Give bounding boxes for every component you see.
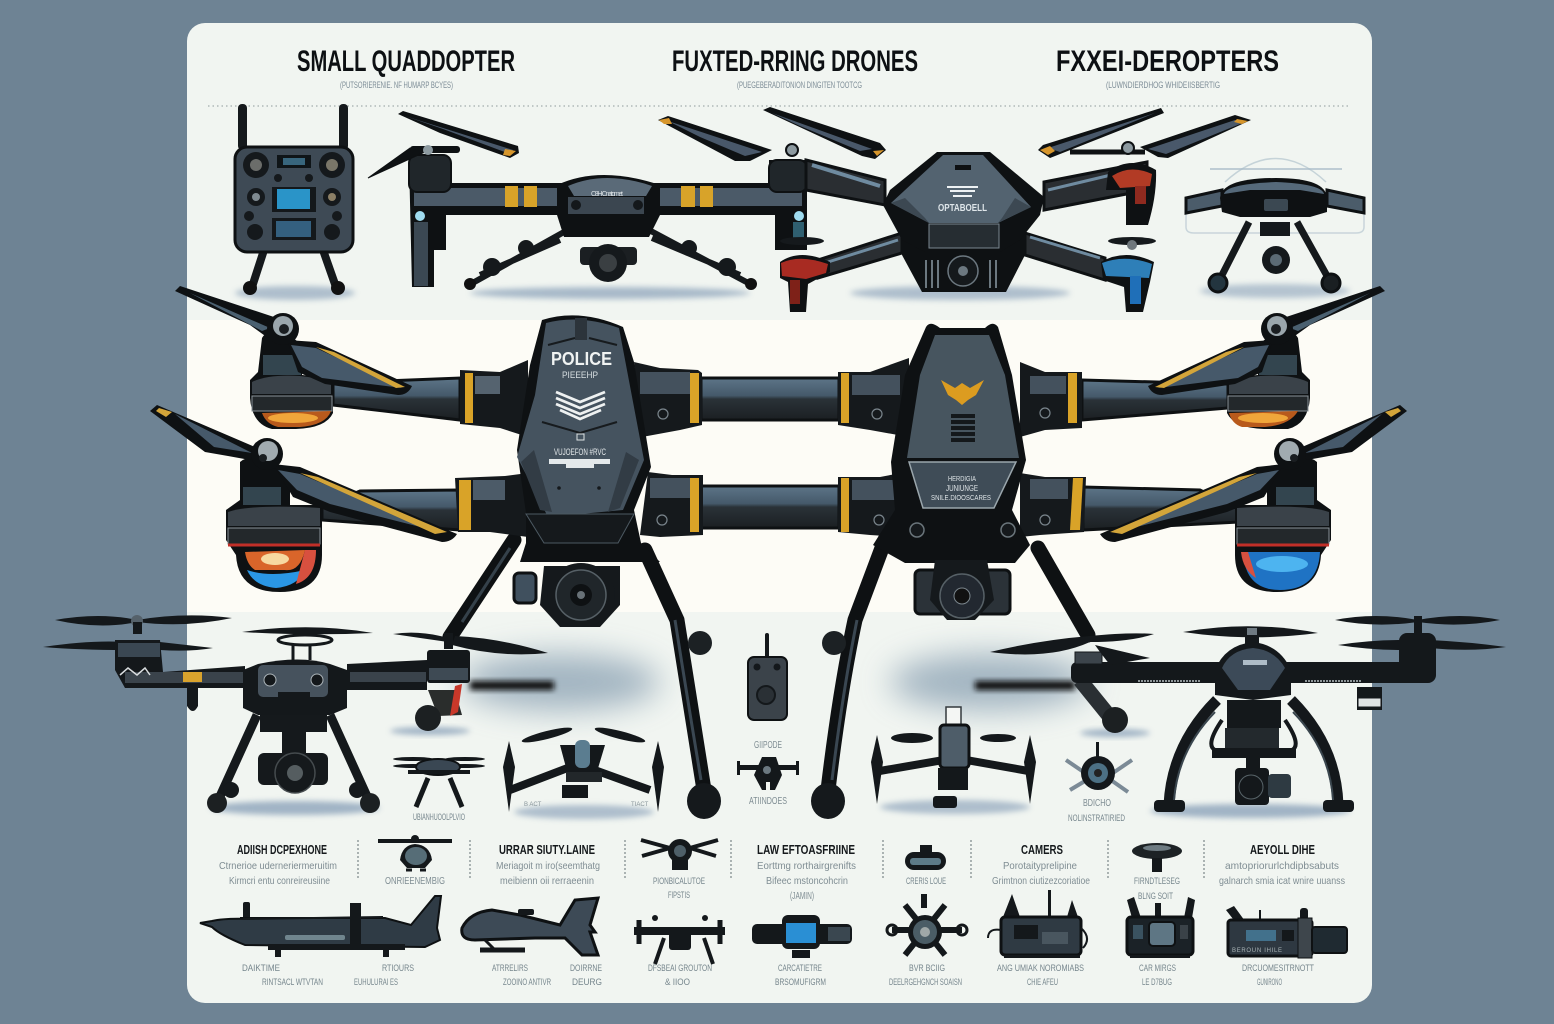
icon: tiny handheld remote	[748, 633, 787, 720]
label: small quad 2: & IIOO	[665, 977, 690, 988]
label: long drone 1: DAIKTIME	[242, 963, 280, 974]
icon: camera bar	[752, 915, 852, 958]
camera gimbal	[514, 573, 536, 603]
lower icon labels: GUNIRONO	[1257, 977, 1282, 988]
cuffs	[460, 360, 528, 437]
icon: long camera unit: BEROUN IHILE	[1232, 948, 1282, 954]
label: console 2: LE D7BUG	[1142, 977, 1172, 988]
icon: small folding drone	[503, 725, 664, 812]
vent	[951, 414, 975, 442]
drone: large police quadcopter, left	[322, 315, 839, 819]
eagle emblem	[941, 380, 984, 405]
column text 2: Grimtnon ciutizezcoriatioe	[992, 875, 1090, 887]
column text 2: Bifeec mstoncohcrin	[766, 875, 848, 887]
label: stub drone 1: ATRRELIRS	[492, 963, 528, 974]
label: camera unit 1: DRCUOMESITRNOTT	[1242, 963, 1314, 974]
label: console 1: CAR MIRGS	[1139, 963, 1176, 974]
label: sensor 2: NOLINSTRATIRIED	[1068, 813, 1125, 824]
label: propeller craft: ONRIEENEMBIG	[385, 875, 445, 887]
heading: small quadcopter: SMALL QUADDOPTER	[297, 45, 515, 78]
main panel	[187, 23, 1372, 1003]
foot	[811, 783, 845, 819]
section header row	[297, 45, 1279, 90]
icon: long fixed-wing drone	[200, 896, 441, 957]
label: camera bar 1: CARCATIETRE	[778, 963, 822, 974]
subheading: fixed ring drones: (PUEGEBERADITONION DINGITEN TOOTCG	[737, 80, 862, 90]
lower icon labels	[242, 963, 1314, 988]
drone: top centre fixed-ring	[763, 107, 1251, 312]
icon: long camera unit	[1226, 906, 1347, 958]
arms	[333, 378, 460, 420]
drone: large quadcopter, right: JUNIUNGE	[946, 484, 978, 493]
LED: upper left	[262, 411, 331, 427]
arms	[1082, 380, 1228, 420]
icon: fan craft	[641, 839, 718, 870]
label: sensor 1: BDICHO	[1083, 797, 1111, 809]
column text 1: Eorttmg rorthairgrenifts	[757, 860, 856, 872]
drone: large quadcopter, right	[811, 324, 1240, 819]
label: small quad 1: DFSBEAI GROUTON	[648, 963, 712, 974]
heading: fixed ring drones: FUXTED-RRING DRONES	[672, 45, 918, 78]
body	[873, 324, 1030, 563]
centre band	[187, 320, 1372, 612]
column text 1: amtopriorurlchdipbsabuts	[1225, 860, 1339, 872]
icon: console	[1127, 897, 1195, 958]
drone: top quadcopter	[368, 111, 807, 290]
icon: mushroom sensor	[1132, 843, 1182, 872]
icon: mini drone	[737, 757, 799, 790]
motors with propellers, right side	[1100, 286, 1407, 592]
label: mushroom sensor 2: BLNG SOIT	[1138, 891, 1173, 902]
subheading: rotor drones: (LUWNDIERDHOG WHIDEIISBERTIG	[1106, 80, 1220, 90]
icon: small quad with screen	[634, 915, 725, 964]
icon: small folding drone: TIACT	[631, 802, 649, 808]
icon: small drone with mast	[871, 707, 1036, 808]
chevron emblem	[556, 392, 605, 419]
motors with propellers, left side	[150, 286, 457, 592]
column text 2: galnarch smia icat wnire uuanss	[1219, 875, 1345, 887]
drone: top right ghost-ring	[1186, 158, 1364, 292]
label: small drone: UBIANHUOOLPLVIO	[413, 812, 465, 823]
drone: top centre fixed-ring: OPTABOELL	[938, 203, 987, 214]
label: handheld remote: GIIPODE	[754, 739, 782, 751]
cuffs	[838, 358, 909, 437]
label: gimbal 1: BVR BCIIG	[909, 963, 945, 974]
icon: propeller craft	[378, 835, 452, 870]
label: long drone 3: RINTSACL WTVTAN	[262, 977, 323, 988]
label: radio 2: CHIE AFEU	[1027, 977, 1058, 988]
LED: lower left	[245, 550, 305, 570]
column text 1: Ctrnerioe uderneriermeruitim	[219, 860, 337, 872]
heading: rotor drones: FXXEI-DEROPTERS	[1056, 45, 1279, 78]
lower text columns	[219, 842, 1345, 902]
icon: capsule	[905, 845, 946, 870]
label: radio 1: ANG UMIAK NOROMIABS	[997, 963, 1084, 974]
label: camera bar 2: BRSOMUFIGRM	[775, 977, 826, 988]
column text 2: meibienn oii rerraeenin	[500, 875, 594, 887]
label: capsule: CRERIS LOUE	[906, 876, 946, 887]
label: stub drone 3: ZOOINO ANTIVR	[503, 977, 551, 988]
column text 3: (JAMIN)	[790, 890, 814, 902]
label: stub drone 2: DOIRRNE	[570, 963, 602, 974]
foot	[687, 783, 721, 819]
camera gimbal	[915, 570, 1010, 614]
body text: police: POLICE	[551, 349, 612, 369]
drone: top quadcopter: C8H Cnatomet	[591, 191, 623, 198]
column text 1: Porotaityprelipine	[1003, 860, 1077, 872]
label: fan craft: PIONBICALUTOE	[653, 876, 705, 887]
body subtext: PIEEEHP	[562, 370, 598, 380]
drone: bottom left quadcopter	[43, 615, 548, 813]
label: gimbal 2: DEELRGEHGNCH SOAISN	[889, 977, 962, 988]
LED: upper right	[1229, 411, 1298, 427]
label: fan craft 2: FIPSTIS	[668, 890, 690, 901]
body	[517, 315, 660, 562]
column: urban surveillance: URRAR SIUTY.LAINE	[499, 842, 595, 857]
subheading: small quadcopter: (PUTSORIERENIE. NF HUMARP BCYES)	[340, 80, 453, 90]
icon: stub fixed-wing drone	[462, 898, 598, 955]
column text 2: Kirmcri entu conreireusiine	[229, 875, 330, 887]
icon: small folding drone: B ACT	[524, 802, 542, 808]
column: law enforcement: LAW EFTOASFRIINE	[757, 842, 855, 857]
legs	[450, 540, 704, 790]
icon: spider gimbal	[887, 894, 967, 955]
legs	[828, 540, 1088, 790]
label: mushroom sensor: FIRNDTLESEG	[1134, 876, 1180, 887]
label: long drone 2: RTIOURS	[382, 963, 414, 974]
icon: small drone under heading	[393, 757, 485, 807]
column: adish dcpexhone: ADIISH DCPEXHONE	[237, 842, 327, 857]
drone: large quadcopter, right: SNILE.DIOOSCARES	[931, 495, 991, 502]
column: aeyoll dihe: AEYOLL DIHE	[1250, 842, 1315, 857]
ground shadows	[210, 284, 1350, 819]
column text 1: Meriagoit m iro(seemthatg	[496, 860, 600, 872]
LED: lower right	[1243, 552, 1320, 590]
label: mini drone: ATIINDOES	[749, 795, 787, 807]
label: long drone 4: EUHULURAI ES	[354, 977, 398, 988]
drone: bottom right quadcopter	[990, 616, 1506, 812]
icon: radio unit	[988, 890, 1087, 958]
icon: round sensor	[1066, 742, 1132, 792]
body text: lower mark: VUJOEFON #RVC	[554, 447, 606, 457]
column: cameras: CAMERS	[1021, 842, 1063, 857]
label: stub drone 4: DEURG	[572, 977, 602, 988]
body text: lower plate: HERDIGIA	[948, 476, 976, 483]
icon: remote controller	[235, 104, 353, 295]
